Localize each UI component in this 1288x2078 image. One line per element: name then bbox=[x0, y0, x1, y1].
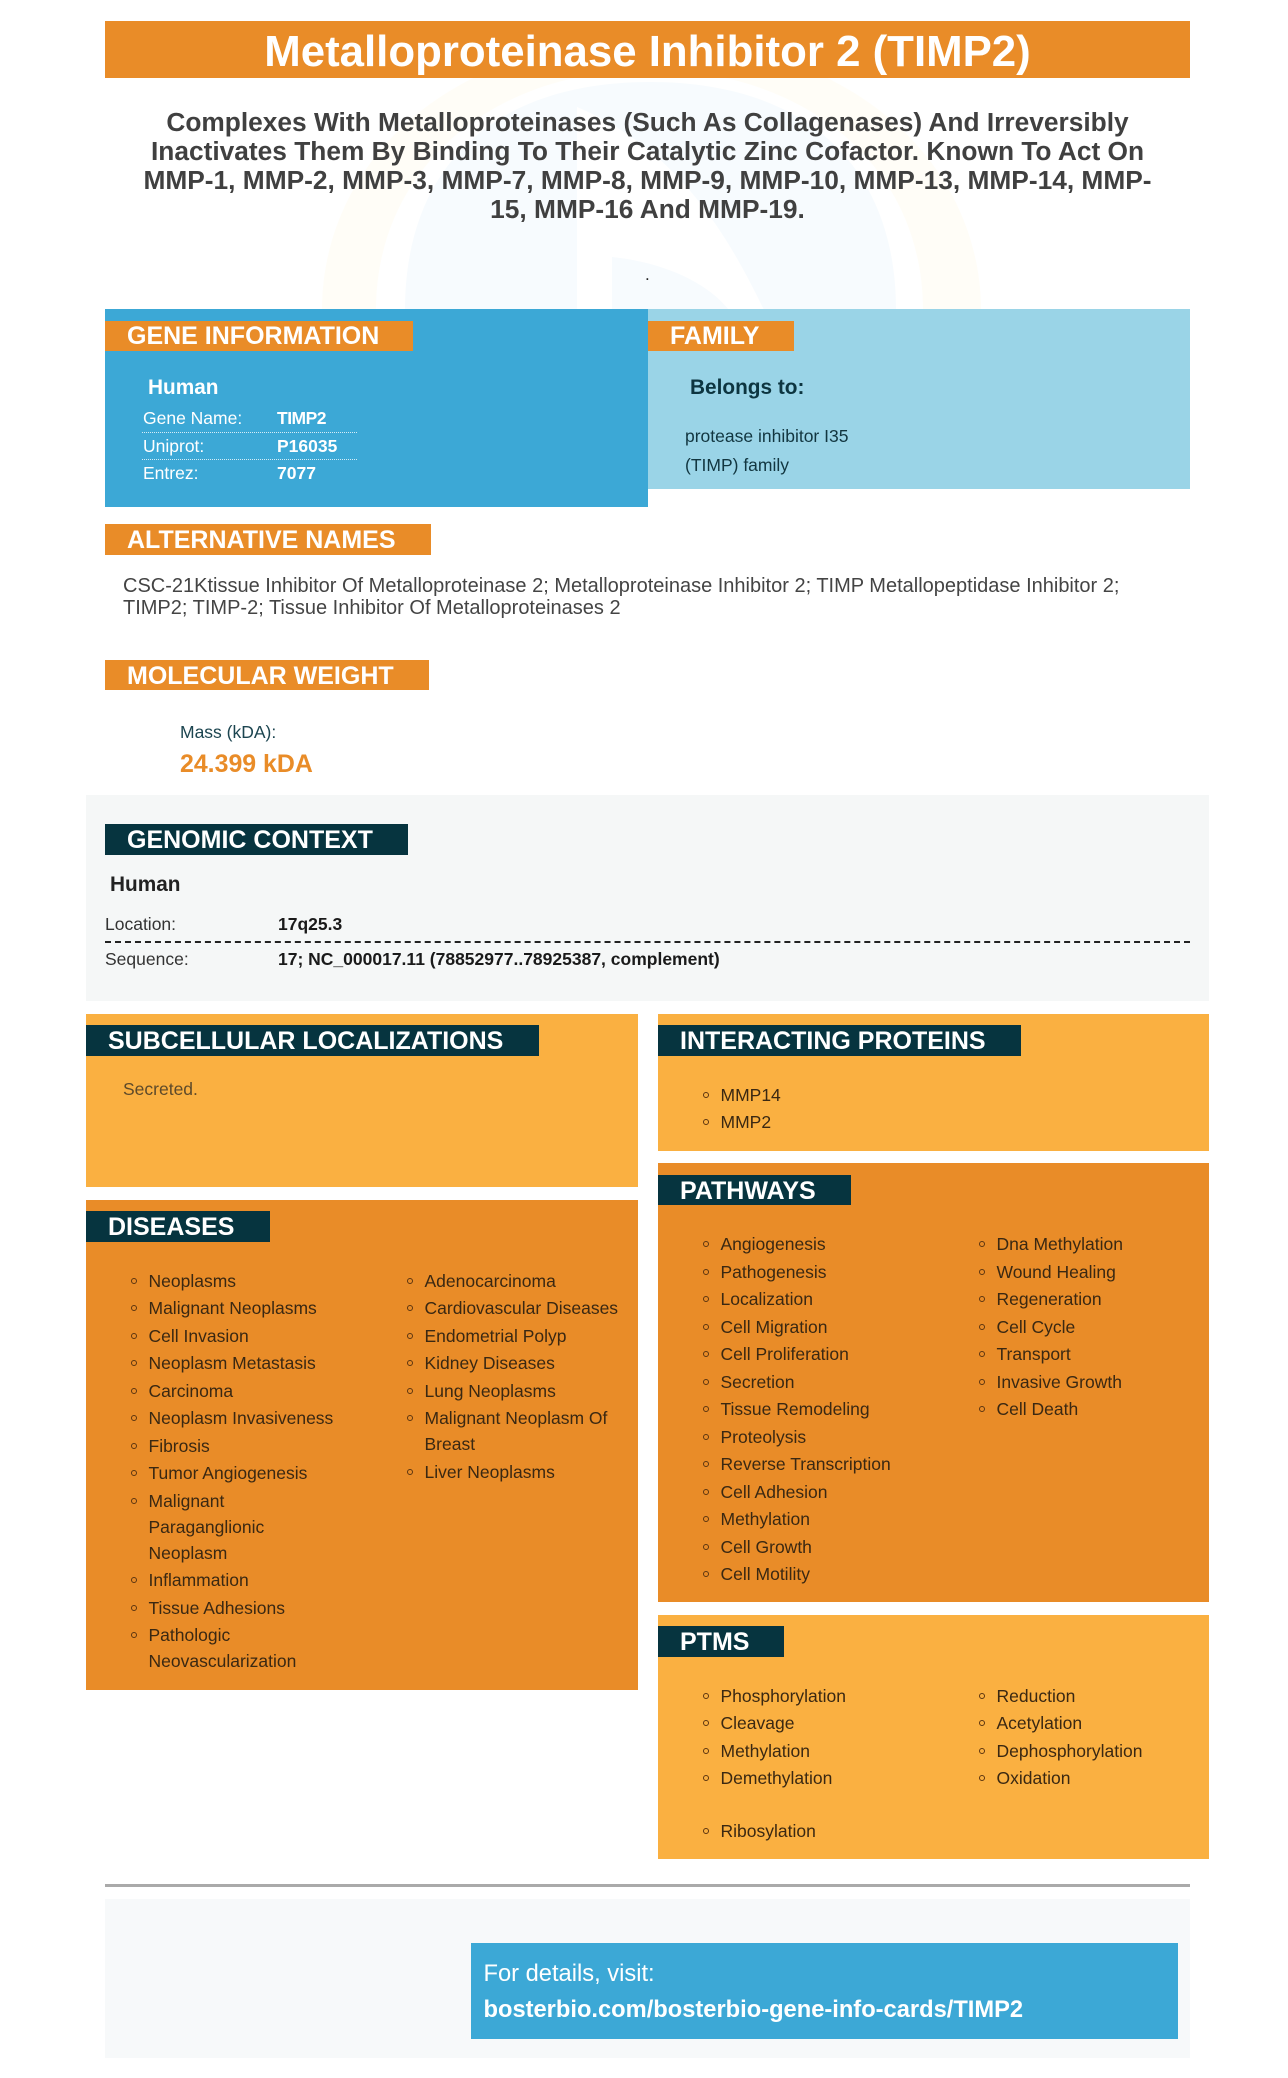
location row bbox=[105, 914, 342, 934]
pathways list column 1 bbox=[703, 1234, 891, 1584]
panel: gene information bbox=[105, 309, 648, 507]
panel: family bbox=[648, 309, 1190, 489]
diseases list column 1: Neoplasm bbox=[148, 1543, 227, 1563]
pathways list column 2 bbox=[979, 1234, 1123, 1419]
panel: pathways bbox=[658, 1163, 1209, 1602]
pathways list column 1: Tissue Remodeling bbox=[720, 1399, 870, 1419]
protein list: MMP2 bbox=[720, 1112, 771, 1132]
entrez row: 7077 bbox=[277, 463, 316, 483]
heading: family bbox=[648, 321, 794, 351]
uniprot row: P16035 bbox=[277, 436, 337, 456]
callout: details link bbox=[471, 1943, 1178, 2039]
pathways list column 1: Pathogenesis bbox=[720, 1262, 827, 1282]
details label: For details, visit: bbox=[484, 1961, 655, 1987]
pathways list column 1: Cell Growth bbox=[720, 1536, 812, 1556]
pathways list column 1: Proteolysis bbox=[720, 1426, 806, 1446]
pathways list column 2: Dna Methylation bbox=[996, 1234, 1123, 1254]
species label: Human bbox=[148, 376, 218, 399]
diseases list column 1: Neovascularization bbox=[148, 1651, 296, 1671]
pathways list column 2: Regeneration bbox=[996, 1289, 1102, 1309]
pathways list column 1: Cell Proliferation bbox=[720, 1344, 849, 1364]
pathways list column 1: Localization bbox=[720, 1289, 813, 1309]
diseases list column 1: Fibrosis bbox=[148, 1436, 210, 1456]
diseases list column 2 bbox=[407, 1271, 618, 1482]
diseases list column 2: Adenocarcinoma bbox=[424, 1271, 556, 1291]
family text bbox=[685, 426, 848, 475]
heading: pathways: PATHWAYS bbox=[680, 1177, 816, 1205]
diseases list column 2: Liver Neoplasms bbox=[424, 1462, 555, 1482]
ptms list column 1: Ribosylation bbox=[720, 1821, 816, 1841]
ptms list column 2: Oxidation bbox=[996, 1768, 1070, 1788]
alternative names text bbox=[123, 575, 1119, 619]
sequence row: Sequence: bbox=[105, 949, 189, 969]
pathways list column 2: Cell Cycle bbox=[996, 1316, 1075, 1336]
description: MMP-1, MMP-2, MMP-3, MMP-7, MMP-8, MMP-9, MMP-10, MMP-13, MMP-14, MMP- bbox=[143, 165, 1152, 195]
diseases list column 2: Malignant Neoplasm Of bbox=[424, 1408, 607, 1428]
panel: ptms bbox=[658, 1615, 1209, 1859]
family text: protease inhibitor I35 bbox=[685, 426, 848, 446]
uniprot row: Uniprot: bbox=[143, 436, 204, 456]
description bbox=[143, 107, 1152, 224]
family text: (TIMP) family bbox=[685, 455, 789, 475]
mass label: Mass (kDA): bbox=[180, 722, 276, 742]
location row: 17q25.3 bbox=[278, 914, 342, 934]
pathways list column 1: Secretion bbox=[720, 1372, 794, 1392]
protein list bbox=[703, 1085, 781, 1132]
panel: subcellular localizations bbox=[86, 1014, 638, 1187]
diseases list column 2: Kidney Diseases bbox=[424, 1353, 555, 1373]
ptms list column 2: Reduction bbox=[996, 1686, 1075, 1706]
diseases list column 1 bbox=[131, 1271, 333, 1671]
description: 15, MMP-16 And MMP-19. bbox=[490, 194, 805, 224]
panel: footer bbox=[105, 1899, 1190, 2058]
heading: diseases bbox=[86, 1211, 270, 1242]
protein list: MMP14 bbox=[720, 1085, 781, 1105]
alternative names text: TIMP2; TIMP-2; Tissue Inhibitor Of Metalloproteinases 2 bbox=[123, 597, 621, 619]
heading: family: FAMILY bbox=[670, 322, 759, 350]
pathways list column 1: Methylation bbox=[720, 1509, 810, 1529]
pathways list column 2: Cell Death bbox=[996, 1399, 1078, 1419]
diseases list column 2: Lung Neoplasms bbox=[424, 1381, 556, 1401]
title banner bbox=[105, 21, 1190, 78]
pathways list column 1: Cell Migration bbox=[720, 1316, 827, 1336]
heading: ptms: PTMS bbox=[680, 1628, 749, 1656]
diseases list column 1: Pathologic bbox=[148, 1625, 230, 1645]
localization text: Secreted. bbox=[123, 1079, 198, 1099]
panel: diseases bbox=[86, 1200, 638, 1690]
heading: ptms bbox=[658, 1626, 784, 1657]
heading: pathways bbox=[658, 1175, 851, 1205]
diseases list column 1: Inflammation bbox=[148, 1570, 249, 1590]
panel: interacting proteins bbox=[658, 1014, 1209, 1151]
pathways list column 1: Angiogenesis bbox=[720, 1234, 826, 1254]
entrez row bbox=[143, 463, 316, 483]
pathways list column 2: Invasive Growth bbox=[996, 1372, 1122, 1392]
gene name row: TIMP2 bbox=[277, 408, 326, 428]
diseases list column 1: Neoplasm Invasiveness bbox=[148, 1408, 333, 1428]
diseases list column 1: Tissue Adhesions bbox=[148, 1598, 285, 1618]
diseases list column 1: Malignant bbox=[148, 1491, 224, 1511]
small dot text: . bbox=[645, 265, 650, 284]
entrez row: Entrez: bbox=[143, 463, 198, 483]
heading: subcellular localizations: SUBCELLULAR LOCALIZATIONS bbox=[108, 1027, 503, 1055]
panel: genomic context bbox=[86, 795, 1209, 1001]
sequence row: 17; NC_000017.11 (78852977..78925387, complement) bbox=[278, 949, 720, 969]
watermark logo bbox=[0, 0, 1288, 320]
diseases list column 2: Cardiovascular Diseases bbox=[424, 1298, 618, 1318]
diseases list column 1: Carcinoma bbox=[148, 1381, 233, 1401]
uniprot row bbox=[143, 436, 337, 456]
ptms list column 2: Acetylation bbox=[996, 1713, 1082, 1733]
diseases list column 1: Neoplasms bbox=[148, 1271, 236, 1291]
ptms list column 1: Methylation bbox=[720, 1741, 810, 1761]
ptms list column 2: Dephosphorylation bbox=[996, 1741, 1142, 1761]
location row: Location: bbox=[105, 914, 176, 934]
ptms list column 1 bbox=[703, 1686, 846, 1841]
ptms list column 1: Cleavage bbox=[720, 1713, 794, 1733]
heading: interacting proteins: INTERACTING PROTEINS bbox=[680, 1027, 986, 1055]
pathways list column 1: Cell Motility bbox=[720, 1564, 810, 1584]
mass value: 24.399 kDA bbox=[180, 750, 313, 778]
heading: genomic context: GENOMIC CONTEXT bbox=[127, 826, 373, 854]
heading: molecular weight: MOLECULAR WEIGHT bbox=[127, 662, 394, 690]
ptms list column 2 bbox=[979, 1686, 1142, 1788]
alternative names text: CSC-21Ktissue Inhibitor Of Metalloproteinase 2; Metalloproteinase Inhibitor 2; TIMP Metallopeptidase Inhibitor 2; bbox=[123, 575, 1119, 597]
heading: gene information: GENE INFORMATION bbox=[127, 322, 379, 350]
pathways list column 1: Reverse Transcription bbox=[720, 1454, 891, 1474]
details url: bosterbio.com/bosterbio-gene-info-cards/TIMP2 bbox=[484, 1997, 1023, 2023]
diseases list column 2: Endometrial Polyp bbox=[424, 1326, 567, 1346]
ptms list column 1: Phosphorylation bbox=[720, 1686, 846, 1706]
description: Complexes With Metalloproteinases (Such As Collagenases) And Irreversibly bbox=[166, 107, 1129, 137]
pathways list column 1: Cell Adhesion bbox=[720, 1482, 828, 1502]
pathways list column 2: Wound Healing bbox=[996, 1262, 1116, 1282]
heading: alternative names: ALTERNATIVE NAMES bbox=[127, 526, 396, 554]
diseases list column 1: Cell Invasion bbox=[148, 1326, 249, 1346]
gene name row bbox=[143, 408, 326, 428]
pathways list column 2: Transport bbox=[996, 1344, 1071, 1364]
belongs to label: Belongs to: bbox=[690, 376, 804, 399]
diseases list column 2: Breast bbox=[424, 1434, 475, 1454]
ptms list column 1: Demethylation bbox=[720, 1768, 832, 1788]
diseases list column 1: Paraganglionic bbox=[148, 1517, 264, 1537]
species label: Human bbox=[110, 873, 180, 896]
diseases list column 1: Neoplasm Metastasis bbox=[148, 1353, 316, 1373]
title banner: Metalloproteinase Inhibitor 2 (TIMP2) bbox=[264, 27, 1031, 76]
diseases list column 1: Malignant Neoplasms bbox=[148, 1298, 317, 1318]
diseases list column 1: Tumor Angiogenesis bbox=[148, 1463, 307, 1483]
gene name row: Gene Name: bbox=[143, 408, 242, 428]
heading: diseases: DISEASES bbox=[108, 1213, 234, 1241]
description: Inactivates Them By Binding To Their Catalytic Zinc Cofactor. Known To Act On bbox=[151, 136, 1144, 166]
